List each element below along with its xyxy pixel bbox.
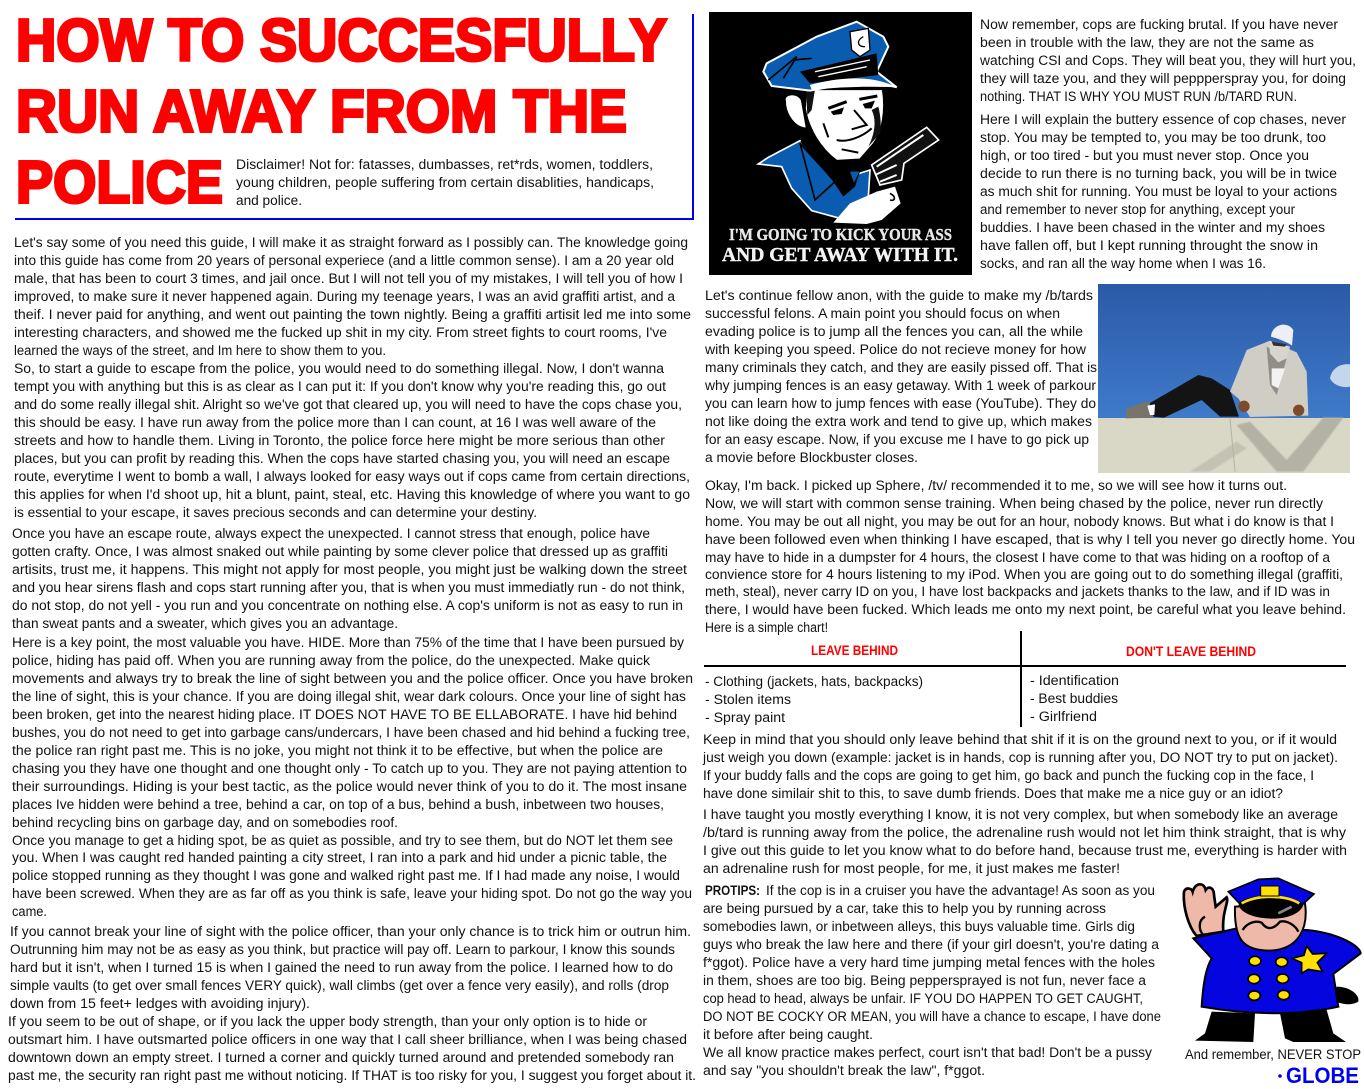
text block: common sense training: Now, we will start with common sense training. When being chased by the police, never run directly [705, 496, 1323, 511]
image: police officer with revolver poster [709, 12, 972, 275]
text block: outrun: If you cannot break your line of sight with the police officer, than your only chance is to trick him or outrun him. [10, 924, 691, 939]
text block: start a guide: route, everytime I went to bomb a wall, I always looked for easy ways out if cops came from certain directions, [14, 469, 690, 484]
text block: never stop: high, or too tired - but you must never stop. Once you [980, 148, 1309, 163]
text block: protips [703, 883, 1161, 1078]
text block: outsmart: outsmart him. I have outsmarted police officers in one way that I call sheer brilliance, when I was being chased [8, 1032, 687, 1047]
text block: hide: places Ive hidden were behind a tree, behind a car, on top of a bus, behind a bush, inbetween two houses, [12, 797, 664, 812]
text block: common sense training: there, I would have been fucked. Which leads me onto my next point, be careful what you leave behind. [705, 602, 1346, 617]
chart: leave behind table [704, 631, 1346, 727]
text block: adrenaline: I give out this guide to let you know what to do before hand, because trust me, everything is harder with [703, 843, 1347, 858]
text block: start a guide: tempt you with anything but this is as clear as I can put it: If you don't know why you're reading this, go out [14, 379, 666, 394]
column: leave behind: - Stolen items [705, 692, 791, 707]
text block: cops are brutal: Now remember, cops are fucking brutal. If you have never [980, 17, 1339, 32]
text block: hide: the line of sight, this is your chance. If you are doing illegal shit, wear dark colours. Once your line of sight has [12, 689, 686, 704]
text block: introduction: interesting characters, and showed me the fucked up shit in my city. From street fights to court rooms, I've [14, 325, 667, 340]
text block: hiding spot: police stopped running as they thought I was gone and walked right past me. If I had made any noise, I would [12, 868, 680, 883]
text block: jumping fences: successful felons. A main point you should focus on when [705, 306, 1060, 321]
text block: hiding spot: have been screwed. When they are as far off as you think is safe, leave your hiding spot. Do not go the way you [12, 886, 692, 901]
title: HOW TO SUCCESFULLY [16, 8, 667, 74]
disclaimer: young children, people suffering from certain disablities, handicaps, [236, 175, 654, 190]
text block: outsmart: If you seem to be out of shape, or if you lack the upper body strength, than your only option is to hide or [8, 1014, 648, 1029]
image: police officer with revolver poster: I'M GOING TO KICK YOUR ASS [729, 225, 952, 244]
disclaimer: and police. [236, 193, 302, 208]
text block: hide: movements and always try to break the line of sight between you and the police officer. Once you have broken [12, 671, 693, 686]
text block: cops are brutal: been in trouble with the law, they are not the same as [980, 35, 1314, 50]
text block: protips: DO NOT BE COCKY OR MEAN, you will have a chance to escape, I have done [703, 1009, 1161, 1024]
text block: start a guide: and do some really illegal shit. Alright so we've got that cleared up, you will need to have the cops chase you, [14, 397, 682, 412]
text block: never stop: buddies. I have been chased in the winter and my shoes [980, 220, 1325, 235]
text block: introduction: improved, to make sure it never happened again. During my teenage years, I was an avid graffiti artist, and a [14, 289, 675, 304]
text block: jumping fences: a movie before Blockbuster closes. [705, 450, 918, 465]
text block: never stop: as much shit for running. You must be loyal to your actions [980, 184, 1337, 199]
text block: outsmart [8, 1014, 696, 1083]
text block: hiding spot [12, 833, 692, 919]
text block: keep in mind: If your buddy falls and the cops are going to get him, go back and punch the fucking cop in the face, I [703, 768, 1314, 783]
text block: hide: chasing you they have one thought and one thought only - To catch up to you. They are not paying attention to [12, 761, 687, 776]
text block: hide: their surroundings. Hiding is your best tactic, as the police would never think of you to do it. The most insane [12, 779, 687, 794]
text block: escape route [12, 526, 687, 631]
text block: common sense training: Here is a simple chart! [705, 620, 828, 635]
text block: keep in mind [702, 732, 1338, 801]
title [16, 8, 667, 216]
text block: outsmart: downtown down an empty street. I turned a corner and quickly turned around and pretended somebody ran [8, 1050, 674, 1065]
text block: outrun: simple vaults (to get over small fences VERY quick), wall climbs (get over a fence very easily), and rolls (drop [10, 978, 669, 993]
text block: start a guide: is essential to your escape, it saves precious seconds and can determine your destiny. [14, 505, 537, 520]
text block: hide: the police ran right past me. This is no joke, you might not think it to be effective, but when the police are [12, 743, 663, 758]
text block: never stop: socks, and ran all the way home when I was 16. [980, 256, 1266, 271]
text block: escape route: do not stop, do not yell - you run and you concentrate on nothing else. A cop's uniform is not as easy to run in [12, 598, 683, 613]
text block: jumping fences: why jumping fences is an easy getaway. With 1 week of parkour [704, 378, 1097, 393]
text block: start a guide: places, but you can profit by reading this. When the cops have started chasing you, you will need an escape [14, 451, 670, 466]
column: leave behind: LEAVE BEHIND [811, 643, 898, 658]
text block: outrun: down from 15 feet+ ledges with avoiding injury). [10, 996, 310, 1011]
column: don't leave behind: - Best buddies [1030, 691, 1118, 706]
text block: common sense training: Okay, I'm back. I picked up Sphere, /tv/ recommended it to me, so we will see how it turns out. [705, 478, 1287, 493]
text block: jumping fences: evading police is to jump all the fences you can, all the while [705, 324, 1083, 339]
text block: protips: guys who break the law here and there (if your girl doesn't, you're dating a [703, 937, 1159, 952]
text block: protips: are being pursued by a car, take this to help you by running across [703, 901, 1106, 916]
text block: cops are brutal: watching CSI and Cops. They will beat you, they will hurt you, [979, 53, 1356, 68]
column: don't leave behind: - Identification [1030, 673, 1119, 688]
text block: introduction: learned the ways of the street, and Im here to show them to you. [14, 343, 386, 358]
text block: escape route: than sweat pants and a sweater, which gives you an advantage. [12, 616, 398, 631]
text block: hide: behind recycling bins on garbage day, and on somebodies roof. [12, 815, 398, 830]
text block: cops are brutal: they will taze you, and they will peppperspray you, for doing [980, 71, 1346, 86]
column: leave behind: - Clothing (jackets, hats, backpacks) [705, 674, 923, 689]
text block: protips: f*ggot). Police have a very hard time jumping metal fences with the holes [703, 955, 1155, 970]
text block: jumping fences: Let's continue fellow anon, with the guide to make my /b/tards [705, 288, 1093, 303]
text block: common sense training [705, 478, 1355, 635]
disclaimer: Disclaimer! Not for: fatasses, dumbasses, ret*rds, women, toddlers, [236, 157, 653, 172]
text block: start a guide: streets and how to handle them. Living in Toronto, the police force here might be more serious than other [14, 433, 666, 448]
text block: never stop: stop. You may be tempted to, you may be too drunk, too [980, 130, 1326, 145]
text block: never stop: decide to run there is no turning back, you will be in twice [980, 166, 1337, 181]
text block: common sense training: convience store for 4 hours listening to my iPod. When you are going out to do something illegal (graffiti, [705, 567, 1343, 582]
column: leave behind: - Spray paint [705, 710, 785, 725]
text block: introduction: Let's say some of you need this guide, I will make it as straight forward as I possibly can. The knowledge going [14, 235, 688, 250]
text block: outsmart: past me, the security ran right past me without noticing. If THAT is too risky for you, I suggest you forget about it. [8, 1068, 696, 1083]
text block: keep in mind: just weigh you down (example: jacket is in hands, cop is running after you, DO NOT try to put on jacket). [702, 750, 1338, 765]
text block: adrenaline: an adrenaline rush for most people, for me, it just makes me faster! [703, 861, 1120, 876]
text block: common sense training: have been followed even when thinking I have escaped, that is why I tell you never go directly home. You [705, 532, 1355, 547]
text block: common sense training: home. You may be out all night, you may be out for an hour, nobody knows. But what i do know is that I [705, 514, 1334, 529]
text block: protips: somebodies lawn, or inbetween alleys, this buys valuable time. Girls dig [703, 919, 1135, 934]
text block: outrun: hard but it isn't, when I turned 15 is when I gained the need to run away from the police. I learned how to do [10, 960, 673, 975]
caption: never stop: And remember, NEVER STOP [1185, 1047, 1361, 1062]
text block: adrenaline: I have taught you mostly everything I know, it is not very complex, but when somebody like an average [703, 807, 1338, 822]
title: POLICE [16, 150, 223, 216]
text block: cops are brutal: nothing. THAT IS WHY YOU MUST RUN /b/TARD RUN. [980, 89, 1297, 104]
text block: common sense training: meth, steal), never carry ID on you, I have lost backpacks and jackets thanks to the law, and if ID was in [705, 584, 1330, 599]
text block: keep in mind: Keep in mind that you should only leave behind that shit if it is on the ground next to you, or if it would [703, 732, 1337, 747]
text block: hide: bushes, you do not need to get into garbage cans/undercars, I have been chased and hid behind a fucking tree, [12, 725, 690, 740]
text block: never stop [980, 112, 1347, 271]
image: masked man climbing a wall [1098, 284, 1350, 473]
text block: protips: it before after being caught. [703, 1027, 873, 1042]
text block: jumping fences [704, 288, 1097, 465]
text block: escape route: artisits, trust me, it happens. This might not apply for most people, you might just be walking down the street [12, 562, 687, 577]
text block: escape route: Once you have an escape route, always expect the unexpected. I cannot stress that enough, police have [12, 526, 650, 541]
text block: outrun: Outrunning him may not be as easy as you think, but practice will pay off. Learn to parkour, I know this sounds [10, 942, 675, 957]
logo: globe: GLOBE [1286, 1063, 1359, 1088]
text block: hide [12, 635, 693, 830]
text block: never stop: Here I will explain the buttery essence of cop chases, never [980, 112, 1347, 127]
text block: hiding spot: you. When I was caught red handed painting a city street, I ran into a park and hid under a picnic table, the [12, 850, 667, 865]
column: don't leave behind [1030, 644, 1256, 724]
text block: adrenaline [703, 807, 1347, 876]
column: leave behind [705, 643, 923, 725]
text block: hiding spot: came. [12, 904, 47, 919]
text block: never stop: have fallen off, but I kept running throught the snow in [980, 238, 1318, 253]
text block: jumping fences: with keeping you speed. Police do not recieve money for how [704, 342, 1086, 357]
text block: start a guide [14, 361, 690, 520]
text block: jumping fences: many criminals they catch, and they are easily pissed off. That is [705, 360, 1097, 375]
text block: introduction: male, that has been to court 3 times, and jail once. But I will not tell you of my mistakes, I will tell you of how I [14, 271, 683, 286]
title: RUN AWAY FROM THE [16, 78, 627, 144]
text block: hide: police, hiding has paid off. When you are running away from the police, do the unexpected. Make quick [12, 653, 650, 668]
disclaimer [236, 157, 654, 208]
title box border [15, 14, 694, 220]
text block: protips: in them, shoes are too big. Being peppersprayed is not fun, never face a [703, 973, 1146, 988]
text block: adrenaline: /b/tard is running away from the police, the adrenaline rush would not let him think straight, that is why [703, 825, 1346, 840]
text block: start a guide: So, to start a guide to escape from the police, you would need to do something illegal. Now, I don't wanna [14, 361, 665, 376]
text block: escape route: gotten crafty. Once, I was almost snaked out while painting by some clever police that dressed up as graffiti [12, 544, 668, 559]
text block: introduction [14, 235, 691, 358]
text block: jumping fences: not like doing the extra work and tend to give up, which makes [705, 414, 1092, 429]
text block: hide: Here is a key point, the most valuable you have. HIDE. More than 75% of the time that I have been pursued by [12, 635, 684, 650]
text block: common sense training: may have to hide in a dumpster for 4 hours, the closest I have come to that was hiding on a rooftop of a [705, 550, 1330, 565]
text block: outrun [10, 924, 691, 1011]
column: don't leave behind: DON'T LEAVE BEHIND [1126, 644, 1256, 659]
text block: cops are brutal [979, 17, 1356, 104]
text block: escape route: and you hear sirens flash and cops start running after you, that is when you must immediatly run - do not think, [12, 580, 685, 595]
text block: keep in mind: have done similair shit to this, to save dumb friends. Does that make me a nice guy or an idiot? [703, 786, 1283, 801]
image: police officer with revolver poster: AND GET AWAY WITH IT. [722, 244, 958, 266]
text block: jumping fences: for an easy escape. Now, if you excuse me I have to go pick up [705, 432, 1089, 447]
text block: never stop: and remember to never stop for anything, except your [980, 202, 1295, 217]
text block: protips: and say "you shouldn't break the law", f*ggot. [703, 1063, 985, 1078]
text block: protips: cop head to head, always be unfair. IF YOU DO HAPPEN TO GET CAUGHT, [703, 991, 1143, 1006]
text block: hiding spot: Once you manage to get a hiding spot, be as quiet as possible, and try to see them, but do NOT let them see [12, 833, 673, 848]
text block: hide: been broken, get into the nearest hiding place. IT DOES NOT HAVE TO BE ELLABORATE. I have hid behind [12, 707, 677, 722]
text block: protips: If the cop is in a cruiser you have the advantage! As soon as you [766, 883, 1155, 898]
icon: cartoon police officer with raised hand [1184, 878, 1361, 1042]
text block: introduction: theif. I never paid for anything, and went out painting the town nightly. Being a graffiti artisit led me into some [14, 307, 691, 322]
column: don't leave behind: - Girlfriend [1030, 709, 1097, 724]
text block: start a guide: this applies for when I'd shoot up, hit a blunt, paint, steal, etc. Having this knowledge of where you want to go [14, 487, 690, 502]
text block: protips: We all know practice makes perfect, court isn't that bad! Don't be a pussy [703, 1045, 1152, 1060]
text block: jumping fences: you can learn how to jump fences with ease (YouTube). They do [705, 396, 1096, 411]
text block: protips: PROTIPS: [705, 883, 760, 898]
text block: start a guide: this should be easy. I have run away from the police more than I can count, at 16 I was well aware of the [14, 415, 656, 430]
text block: introduction: into this guide has come from 20 years of personal experiece (and a little common sense). I am a 20 year old [14, 253, 674, 268]
